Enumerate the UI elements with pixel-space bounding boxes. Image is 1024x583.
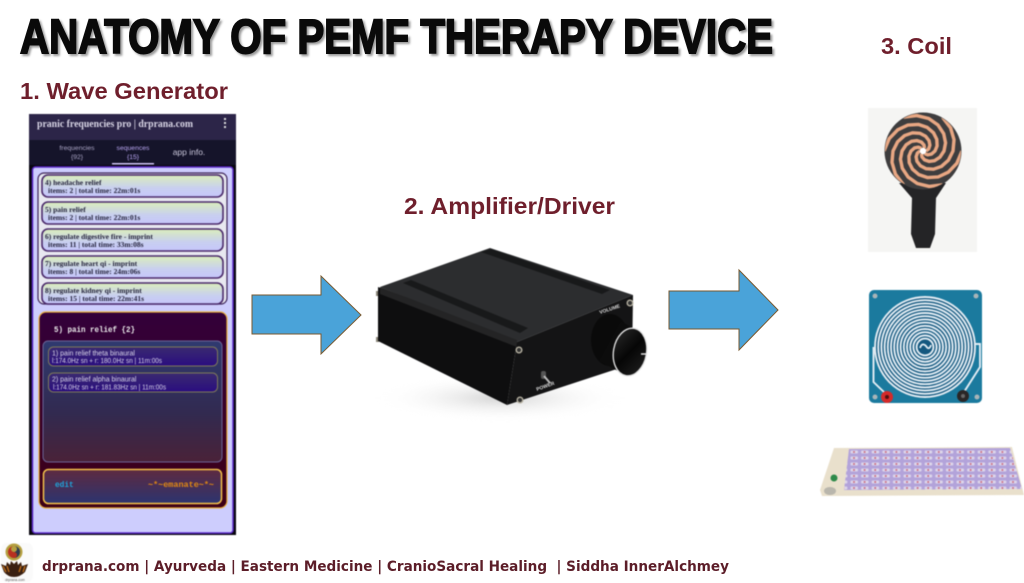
board screws — [872, 294, 980, 400]
top face — [380, 248, 633, 342]
track 2: l:174.0Hz sn + r: 181.83Hz sn | 11m:00s — [53, 384, 166, 392]
action bar — [44, 470, 222, 504]
taegeuk circle — [6, 544, 22, 560]
rear connectors — [376, 291, 379, 342]
track 1: l:174.0Hz sn + r: 180.0Hz sn | 11m:00s — [52, 358, 162, 365]
mat logo — [830, 474, 838, 482]
lavender body — [32, 167, 233, 533]
sequence list — [38, 173, 227, 304]
item 4 — [42, 175, 223, 197]
side face — [378, 287, 517, 405]
power switch: POWER — [536, 381, 556, 393]
app tabs: app info. — [173, 147, 205, 157]
detail panel — [39, 312, 227, 508]
item 6 — [42, 229, 223, 251]
arrow: generator to amplifier — [252, 276, 361, 354]
mat button — [824, 487, 836, 495]
logo caption: drprana.com — [5, 578, 25, 582]
track 1: 1) pain relief theta binaural — [52, 350, 135, 358]
app tabs: {15} — [127, 154, 140, 161]
item 7: items: 8 | total time: 24m:06s — [48, 267, 140, 276]
detail title: 5) pain relief {2} — [54, 325, 135, 335]
item 4: items: 2 | total time: 22m:01s — [48, 186, 140, 195]
footer logo — [1, 543, 33, 582]
amplifier device — [375, 248, 650, 422]
item 6: 6) regulate digestive fire - imprint — [45, 232, 153, 241]
item 5: items: 2 | total time: 22m:01s — [48, 213, 140, 222]
item 7: 7) regulate heart qi - imprint — [45, 259, 138, 268]
item 6: items: 11 | total time: 33m:08s — [48, 240, 144, 249]
lotus — [1, 561, 28, 577]
coil handle — [899, 183, 946, 248]
item 8: 8) regulate kidney qi - imprint — [45, 286, 142, 295]
coil head — [884, 112, 962, 190]
coil: therapy mat — [820, 447, 1024, 496]
item 5: 5) pain relief — [45, 205, 86, 214]
red terminal — [881, 391, 893, 403]
track 2: 2) pain relief alpha binaural — [52, 376, 137, 384]
app header — [29, 114, 236, 140]
item 8 — [42, 283, 223, 304]
coil: spiral circuit board — [869, 290, 982, 403]
item 8: items: 15 | total time: 22m:41s — [48, 294, 144, 303]
item 5 — [42, 202, 223, 224]
heading: coil: 3. Coil — [881, 33, 952, 59]
heading: amplifier: 2. Amplifier/Driver — [404, 193, 615, 219]
footer text: drprana.com | Ayurveda | Eastern Medicine | CranioSacral Healing | Siddha InnerAlchmey — [42, 559, 730, 575]
mat grid — [844, 448, 1022, 490]
arrow: amplifier to coil — [669, 270, 778, 350]
black terminal — [957, 390, 969, 402]
volume knob — [591, 314, 650, 379]
app tabs — [29, 140, 236, 165]
app header: pranic frequencies pro | drprana.com — [37, 119, 194, 130]
app tabs: {92} — [71, 154, 84, 161]
coil: handheld spiral coil — [868, 107, 977, 252]
track 2 — [48, 373, 218, 392]
volume label: VOLUME — [599, 303, 622, 316]
action bar: ~*~emanate~*~ — [148, 480, 214, 490]
item 7 — [42, 256, 223, 278]
track 1 — [48, 347, 218, 366]
action bar: edit — [55, 482, 74, 490]
front face — [507, 295, 633, 405]
panel: phone app screenshot — [29, 114, 236, 535]
app tabs: sequences — [117, 145, 150, 152]
track list — [43, 341, 222, 462]
app tabs: frequencies — [59, 145, 95, 152]
power switch — [536, 371, 556, 393]
heading: wave generator: 1. Wave Generator — [20, 78, 228, 104]
item 4: 4) headache relief — [45, 178, 102, 187]
title: ANATOMY OF PEMF THERAPY DEVICE — [20, 11, 773, 64]
screws — [516, 300, 633, 403]
